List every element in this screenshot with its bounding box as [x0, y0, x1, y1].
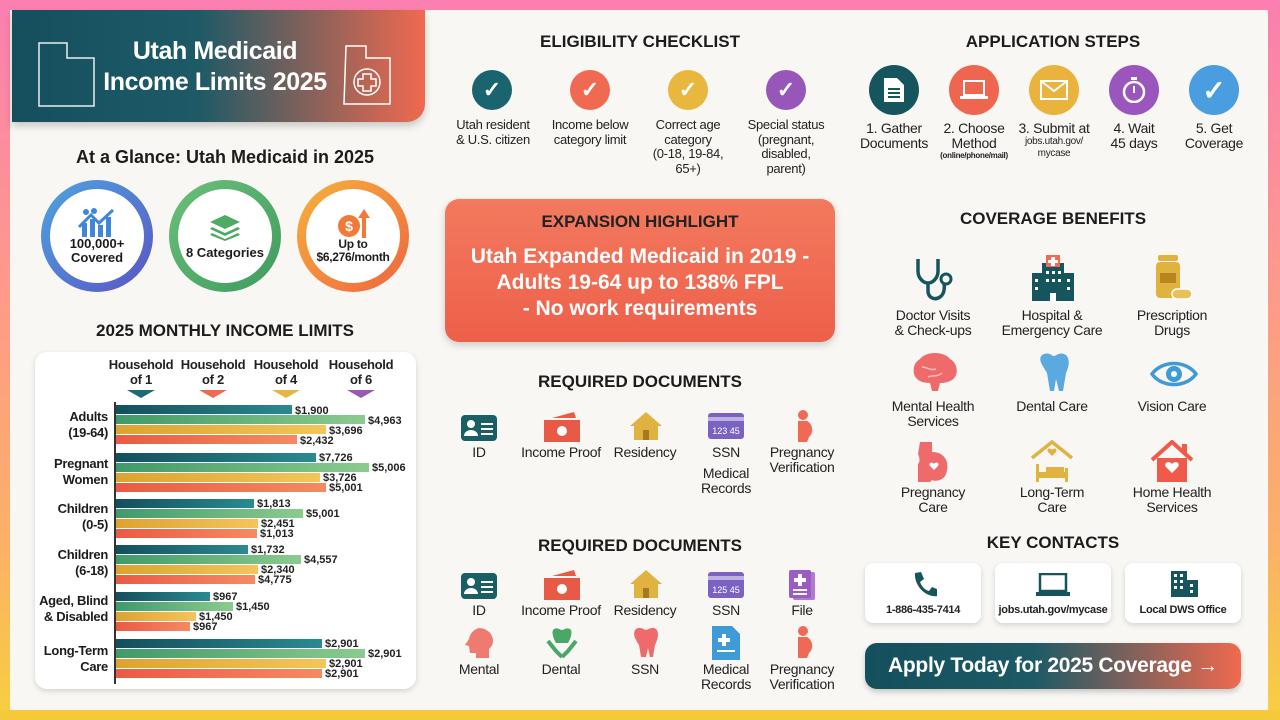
heading: required documents 2: REQUIRED DOCUMENTS — [538, 536, 742, 555]
category labels — [39, 409, 108, 674]
checklist items: ✓ — [483, 77, 501, 102]
bars: $1,813 — [257, 498, 291, 510]
category labels: (6-18) — [75, 563, 108, 578]
documents grid 2 — [459, 570, 834, 692]
bars: $1,732 — [251, 544, 285, 556]
legend: of 2 — [202, 372, 224, 386]
heading: at a glance: At a Glance: Utah Medicaid in 2025 — [76, 147, 374, 167]
category labels: & Disabled — [44, 609, 108, 624]
title text: Income Limits 2025 — [103, 68, 327, 96]
checklist items: & U.S. citizen — [456, 132, 530, 146]
documents row 1: ID — [472, 444, 486, 460]
application steps: 3. Submit at — [1018, 120, 1090, 136]
documents grid 2: Pregnancy — [770, 661, 834, 677]
stat circle: max income: Up to — [338, 237, 368, 251]
category labels: Women — [63, 472, 108, 487]
checklist items: Income below — [552, 117, 628, 132]
documents row 1: Medical — [703, 465, 749, 481]
button: apply today: Apply Today for 2025 Coverage → — [888, 654, 1218, 677]
bars: $967 — [193, 621, 217, 633]
documents row 1: Records — [701, 480, 751, 496]
category labels: (19-64) — [68, 425, 108, 440]
checklist items: Special status — [748, 117, 824, 132]
coverage benefits grid: Dental Care — [1016, 398, 1088, 414]
stat circle: covered — [41, 180, 153, 292]
legend: of 1 — [130, 372, 152, 386]
documents grid 2: Residency — [614, 602, 676, 618]
bars: $4,557 — [304, 554, 338, 566]
bars: $7,726 — [319, 452, 353, 464]
coverage benefits grid — [892, 255, 1211, 515]
stat circle: max income — [297, 180, 409, 292]
legend: Household — [254, 357, 318, 372]
stat circle: covered: Covered — [71, 250, 123, 265]
stat circle: max income: $6,276/month — [316, 250, 390, 264]
documents grid 2: File — [791, 602, 813, 618]
category labels: (0-5) — [82, 517, 108, 532]
application steps: Documents — [860, 134, 928, 150]
contact: phone — [865, 563, 981, 623]
legend: of 4 — [275, 372, 297, 386]
bars: $4,963 — [368, 415, 402, 427]
legend: Household — [109, 357, 173, 372]
bars — [116, 405, 406, 680]
chart: income limits — [35, 352, 416, 689]
bars: $5,006 — [372, 462, 406, 474]
coverage benefits grid: Services — [1146, 499, 1198, 515]
application steps: 45 days — [1111, 134, 1157, 150]
title banner — [12, 10, 425, 122]
coverage benefits grid: Vision Care — [1138, 398, 1206, 414]
heading: key contacts: KEY CONTACTS — [987, 533, 1119, 552]
contact: office: Local DWS Office — [1140, 604, 1226, 616]
coverage benefits grid: Pregnancy — [901, 484, 965, 500]
documents row 1: 123 45 — [712, 426, 740, 436]
checklist items: ✓ — [581, 77, 599, 102]
callout: expansion highlight: Adults 19-64 up to 138% FPL — [496, 271, 784, 294]
heading: eligibility checklist: ELIGIBILITY CHECKLIST — [540, 32, 740, 51]
checklist items: category limit — [554, 132, 626, 146]
application steps: 5. Get — [1196, 120, 1232, 136]
application steps: 2. Choose — [943, 120, 1005, 136]
documents grid 2: Mental — [459, 661, 499, 677]
checklist items: 65+) — [675, 160, 701, 176]
coverage benefits grid: Services — [907, 413, 959, 429]
bars: $5,001 — [306, 508, 340, 520]
legend: Household — [181, 357, 245, 372]
category labels: Children — [58, 501, 108, 516]
documents grid 2: 125 45 — [712, 585, 740, 595]
checklist items: (0-18, 19-84, — [653, 146, 723, 161]
application steps: Coverage — [1185, 134, 1243, 150]
bars: $1,900 — [295, 405, 329, 417]
documents row 1: SSN — [712, 444, 740, 460]
bars: $1,013 — [260, 528, 294, 540]
coverage benefits grid: Hospital & — [1022, 307, 1082, 323]
documents grid 2: SSN — [631, 661, 659, 677]
checklist items: parent) — [766, 160, 806, 176]
documents grid 2: Dental — [542, 661, 580, 677]
callout: expansion highlight: - No work requirements — [523, 297, 757, 320]
category labels: Long-Term — [44, 643, 108, 658]
checklist items — [456, 70, 824, 176]
documents row 1: Pregnancy — [770, 444, 834, 460]
contact: website: jobs.utah.gov/mycase — [999, 604, 1107, 616]
application steps: mycase — [1038, 148, 1070, 159]
bars: $2,432 — [300, 435, 334, 447]
documents grid 2: ID — [472, 602, 486, 618]
bars: $2,901 — [368, 648, 402, 660]
legend — [109, 357, 393, 398]
documents row 1 — [461, 410, 834, 496]
application steps: 4. Wait — [1114, 120, 1154, 136]
application steps: 1. Gather — [866, 120, 922, 136]
bars: $2,901 — [325, 668, 359, 680]
checklist items: Correct age — [656, 117, 720, 132]
coverage benefits grid: Home Health — [1133, 484, 1211, 500]
callout: expansion highlight: EXPANSION HIGHLIGHT — [541, 212, 739, 231]
bars: $3,696 — [329, 425, 363, 437]
coverage benefits grid: & Check-ups — [895, 322, 971, 338]
checklist items: ✓ — [679, 77, 697, 102]
checklist items: category — [664, 132, 712, 146]
application steps: Method — [952, 134, 996, 150]
coverage benefits grid: Prescription — [1137, 307, 1207, 323]
coverage benefits grid: Drugs — [1154, 322, 1190, 338]
bottom strip — [0, 710, 1280, 720]
application steps: jobs.utah.gov/ — [1025, 136, 1083, 147]
title text — [103, 37, 327, 96]
category labels: Care — [80, 659, 108, 674]
callout: expansion highlight: Utah Expanded Medicaid in 2019 - — [471, 245, 809, 268]
documents row 1: Income Proof — [521, 444, 601, 460]
documents grid 2: Medical — [703, 661, 749, 677]
bars: $5,001 — [329, 482, 363, 494]
checklist items: ✓ — [777, 77, 795, 102]
legend: of 6 — [350, 372, 372, 386]
category labels: Aged, Blind — [39, 593, 108, 608]
heading: monthly income limits: 2025 MONTHLY INCOME LIMITS — [96, 321, 354, 340]
category labels: Pregnant — [54, 456, 108, 471]
bars: $3,726 — [323, 472, 357, 484]
documents row 1: Residency — [614, 444, 676, 460]
heading: required documents 1: REQUIRED DOCUMENTS — [538, 372, 742, 391]
icon: utah outline — [38, 42, 95, 107]
icon: utah medical — [343, 45, 391, 105]
category labels: Adults — [69, 409, 108, 424]
coverage benefits grid: Long-Term — [1020, 484, 1084, 500]
documents row 1: Verification — [770, 459, 834, 475]
coverage benefits grid: Mental Health — [892, 398, 974, 414]
bars: $2,901 — [325, 638, 359, 650]
checklist items: Utah resident — [456, 117, 530, 132]
bars: $1,450 — [236, 601, 270, 613]
coverage benefits grid: Care — [1037, 499, 1067, 515]
callout: expansion highlight — [445, 199, 835, 342]
documents grid 2: Verification — [770, 676, 834, 692]
stat circle: categories: 8 Categories — [186, 244, 264, 260]
coverage benefits grid: Doctor Visits — [896, 307, 970, 323]
documents grid 2: Income Proof — [521, 602, 601, 618]
legend: Household — [329, 357, 393, 372]
documents grid 2: Records — [701, 676, 751, 692]
bars: $967 — [213, 591, 237, 603]
bars: $2,451 — [261, 518, 295, 530]
application steps — [860, 65, 1243, 160]
contact: phone: 1-886-435-7414 — [886, 604, 960, 616]
coverage benefits grid: Emergency Care — [1002, 322, 1102, 338]
application steps: ✓ — [1202, 74, 1226, 106]
checklist items: disabled, — [761, 146, 811, 161]
bars: $2,340 — [261, 564, 295, 576]
title text: Utah Medicaid — [133, 37, 297, 65]
stat circle: max income: $ — [345, 218, 353, 234]
button: apply today — [865, 643, 1241, 689]
documents grid 2: SSN — [712, 602, 740, 618]
heading: coverage benefits: COVERAGE BENEFITS — [960, 209, 1146, 228]
contact: website — [995, 563, 1111, 623]
heading: application steps: APPLICATION STEPS — [966, 32, 1140, 51]
checklist items: (pregnant, — [758, 132, 814, 146]
bars: $4,775 — [258, 574, 292, 586]
bars: $1,450 — [199, 611, 233, 623]
stat circle: categories — [169, 180, 281, 292]
application steps: (online/phone/mail) — [940, 151, 1008, 160]
bars: $2,901 — [329, 658, 363, 670]
coverage benefits grid: Care — [918, 499, 948, 515]
category labels: Children — [58, 547, 108, 562]
stat circle: covered: 100,000+ — [70, 236, 124, 251]
contact: office — [1125, 563, 1241, 623]
